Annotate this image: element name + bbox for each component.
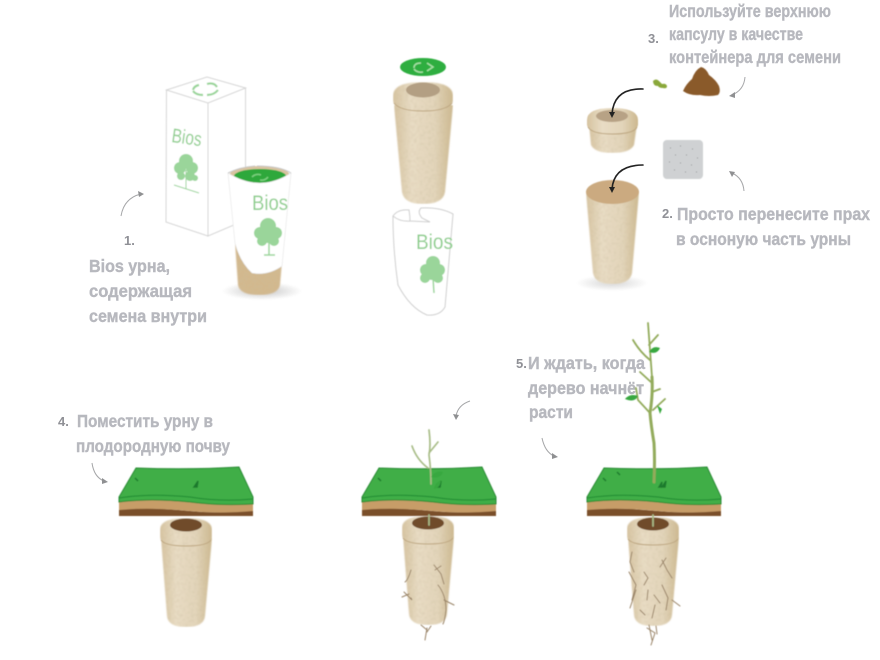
icon: opened paper wrap	[393, 208, 453, 315]
icon: opened paper wrap: Bios	[416, 231, 453, 254]
arrow: step 3 pointer	[729, 77, 745, 98]
urn with first roots	[402, 515, 454, 640]
arrow: step 5 upper pointer	[453, 401, 470, 420]
step 5 text	[528, 353, 645, 422]
step 2 number: 2.	[662, 206, 673, 221]
exploded urn illustration	[393, 58, 453, 315]
ground layer	[587, 467, 721, 516]
arrow: to box	[121, 191, 144, 216]
tree	[617, 323, 665, 487]
arrow: step 2 pointer	[729, 171, 744, 191]
urn with grown roots	[627, 515, 680, 645]
step 3 text: капсулу в качестве	[669, 24, 803, 44]
icon: urn base	[576, 180, 648, 291]
icon: Bios box	[166, 77, 246, 236]
icon: urn body	[393, 82, 453, 204]
step 4 illustration: ground and urn	[119, 467, 253, 627]
sprouting urn illustration	[362, 430, 496, 640]
step 5 text: расти	[529, 402, 573, 422]
step 1 illustration: box and wrapped urn	[166, 77, 302, 300]
icon: urn in paper wrap	[222, 166, 302, 300]
icon: seeds	[653, 80, 667, 88]
step 4 text: плодородную почву	[76, 436, 230, 456]
step 3 text: контейнера для семени	[669, 47, 841, 67]
step 5 text: И ждать, когда	[528, 353, 645, 373]
icon: green seal disc	[400, 58, 446, 76]
step 2/3 illustration	[576, 67, 720, 291]
step 1 text	[89, 256, 207, 326]
step 5 number: 5.	[516, 356, 527, 371]
step 4 text: Поместить урну в	[77, 411, 213, 431]
icon: urn in paper wrap: Bios	[252, 192, 288, 215]
arrow: step 4 pointer	[92, 463, 108, 484]
step 1 text: семена внутри	[89, 306, 207, 326]
icon: Bios box: Bios	[170, 125, 203, 151]
arrow: step 5 lower pointer	[542, 438, 558, 459]
step 1 text: содержащая	[89, 281, 192, 301]
step 1 text: Bios урна,	[89, 256, 170, 276]
grown tree illustration	[587, 323, 721, 645]
step 4 text	[76, 411, 230, 456]
step 3 text: Используйте верхнюю	[669, 1, 831, 21]
step 2 text: в осноную часть урны	[676, 229, 851, 249]
step 4 number: 4.	[58, 414, 69, 429]
sapling above ground	[362, 430, 496, 516]
step 2 text	[676, 204, 870, 249]
icon: soil mound	[683, 67, 720, 96]
step 3 number: 3.	[648, 31, 659, 46]
step 5 text: дерево начнёт	[528, 378, 644, 398]
icon: urn lid	[587, 108, 638, 153]
icon: ash square	[663, 140, 703, 179]
step 3 text	[669, 1, 841, 67]
arrow: seeds to lid	[609, 89, 643, 118]
step 1 number: 1.	[124, 233, 135, 248]
arrow: ash to base	[609, 165, 643, 193]
